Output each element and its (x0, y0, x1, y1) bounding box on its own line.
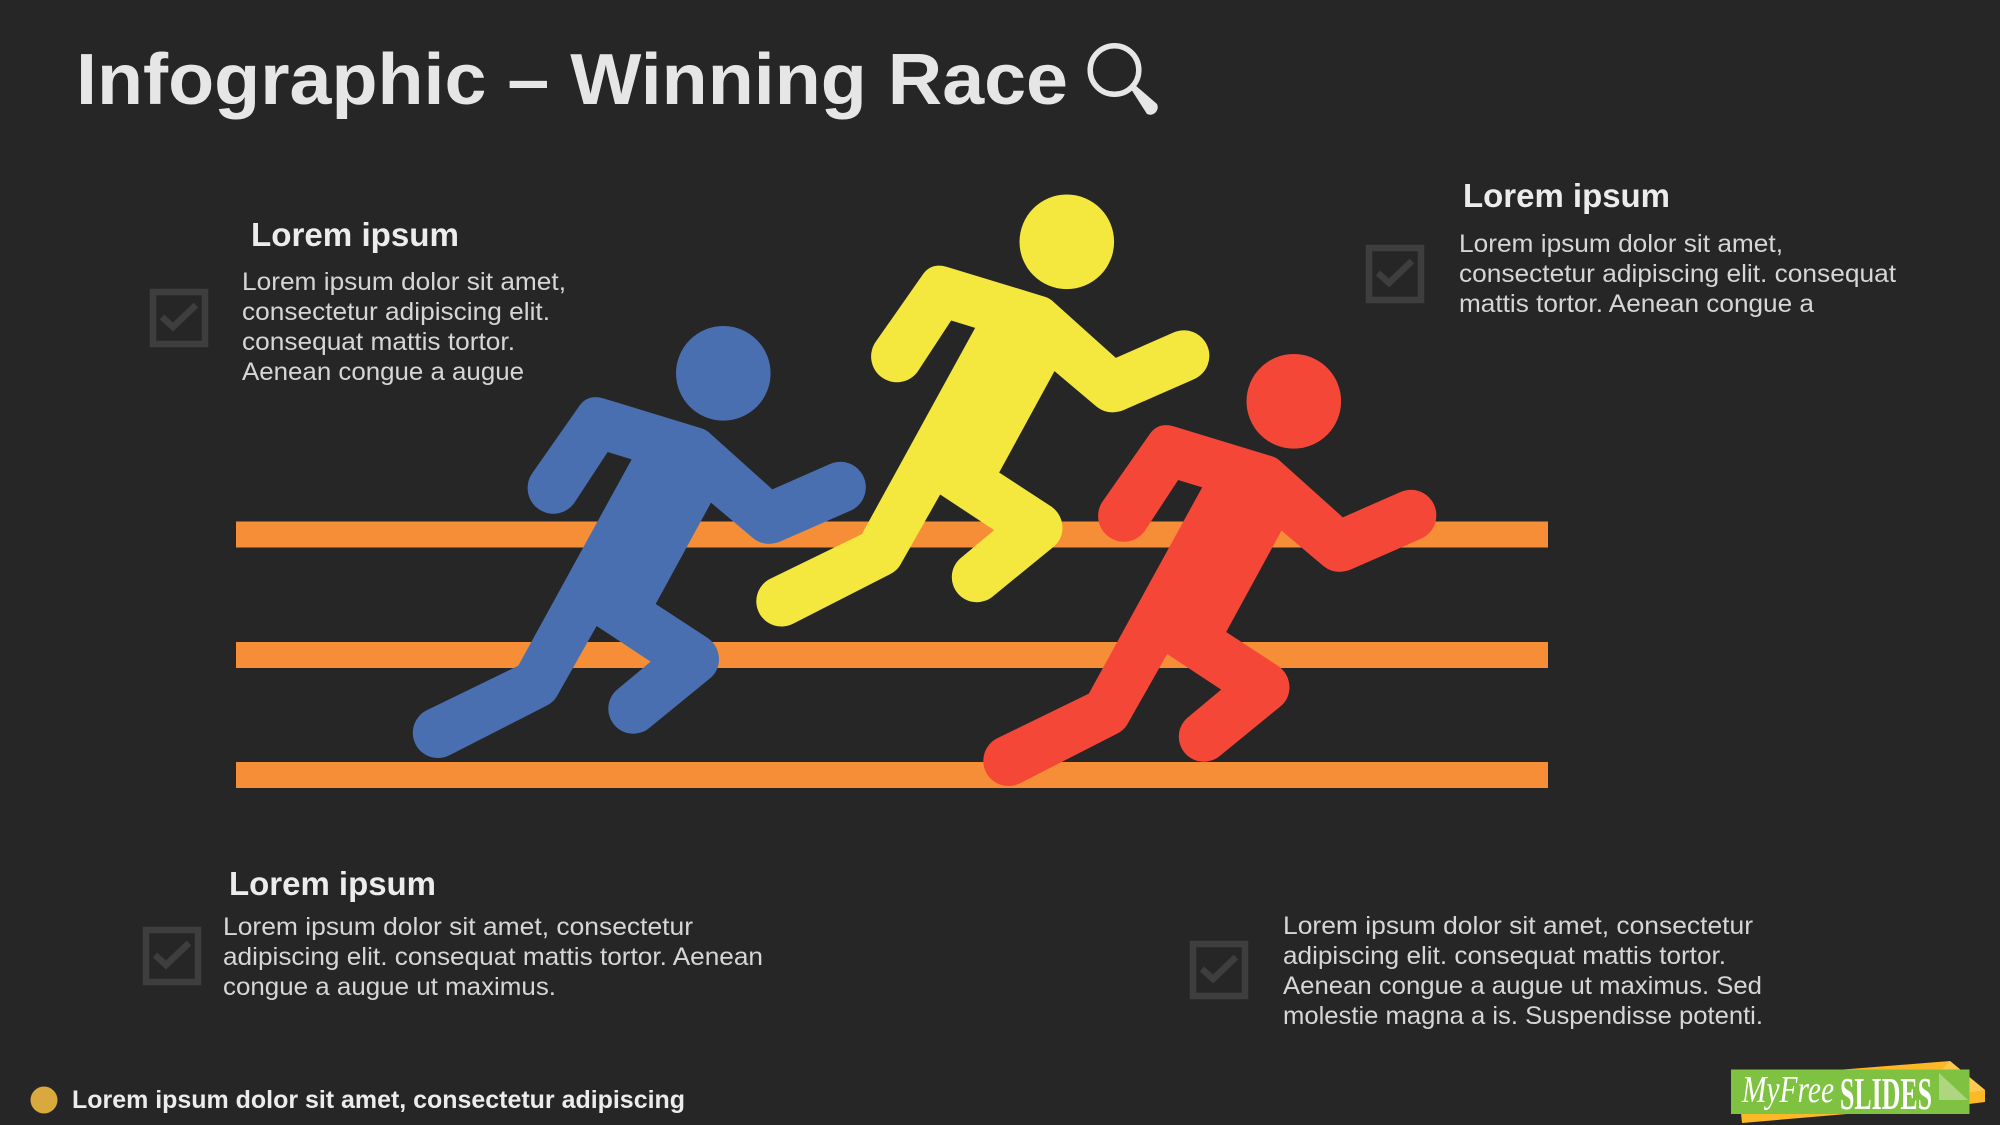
icon: magnifying glass (1090, 46, 1158, 115)
footer note (30, 1086, 685, 1114)
text: top left: consectetur adipiscing elit. (242, 298, 550, 326)
text: bottom left (223, 913, 763, 1001)
text: bottom right: Lorem ipsum dolor sit amet, consectetur (1283, 912, 1753, 940)
text: top right: consectetur adipiscing elit. consequat (1459, 260, 1896, 288)
text: bottom right: Aenean congue a augue ut maximus. Sed (1283, 972, 1762, 1000)
heading: bottom left: Lorem ipsum (229, 865, 436, 902)
footer text: Lorem ipsum dolor sit amet, consectetur adipiscing (72, 1086, 685, 1114)
callout: top left (153, 216, 566, 386)
text: top right: Lorem ipsum dolor sit amet, (1459, 230, 1783, 258)
text: top right (1459, 230, 1896, 318)
heading: top left: Lorem ipsum (251, 216, 459, 253)
text: top left: Aenean congue a augue (242, 358, 524, 386)
text: bottom left: adipiscing elit. consequat mattis tortor. Aenean (223, 943, 763, 971)
title: Infographic – Winning Race (76, 40, 1068, 120)
icon: checkbox bottom right (1193, 944, 1245, 996)
bullet (30, 1086, 58, 1114)
text: bottom right (1283, 912, 1763, 1030)
icon: checkbox top right (1369, 248, 1421, 300)
text: top left: consequat mattis tortor. (242, 328, 515, 356)
text: bottom left: congue a augue ut maximus. (223, 973, 556, 1001)
text: bottom right: molestie magna a is. Suspendisse potenti. (1283, 1002, 1763, 1030)
callout: top right (1369, 177, 1896, 318)
callout: bottom right (1193, 912, 1763, 1030)
runner: blue (413, 326, 866, 758)
text: top right: mattis tortor. Aenean congue a (1459, 290, 1814, 318)
runner: red (983, 354, 1436, 786)
callout: bottom left (146, 865, 763, 1001)
text: top left: Lorem ipsum dolor sit amet, (242, 268, 566, 296)
logo: MyFreeSlides: MyFree (1741, 1069, 1834, 1111)
heading: top right: Lorem ipsum (1463, 177, 1670, 214)
text: top left (242, 268, 566, 386)
logo: MyFreeSlides: SLIDES (1840, 1068, 1932, 1119)
logo: MyFreeSlides (1731, 1061, 1985, 1123)
text: bottom right: adipiscing elit. consequat mattis tortor. (1283, 942, 1726, 970)
track lanes (236, 522, 1548, 788)
icon: checkbox bottom left (146, 930, 198, 982)
runner: yellow (756, 194, 1209, 627)
text: bottom left: Lorem ipsum dolor sit amet, consectetur (223, 913, 693, 941)
icon: checkbox top left (153, 292, 205, 344)
